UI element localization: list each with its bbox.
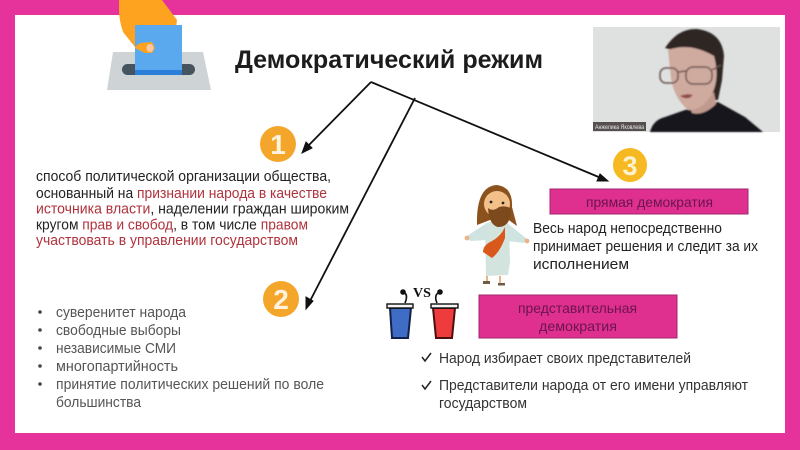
checklist: Представители народа от его имени управляют — [439, 378, 748, 394]
definition paragraph — [36, 169, 349, 249]
icon: ballot box with hand — [107, 0, 211, 90]
definition paragraph: кругом прав и свобод, в том числе правом — [36, 218, 308, 234]
definition paragraph: источника власти, наделении граждан широким — [36, 202, 349, 218]
icon: debate podiums versus: VS — [413, 286, 431, 301]
bullet list: независимые СМИ — [56, 341, 176, 357]
checklist: Народ избирает своих представителей — [439, 351, 691, 367]
bullet list: суверенитет народа — [56, 305, 187, 321]
bullet list: многопартийность — [56, 359, 178, 375]
title: Демократический режим — [235, 46, 543, 74]
webcam photo of presenter: Анжелика Яковлева — [595, 124, 644, 131]
arrow to point 3 — [371, 82, 608, 181]
arrow to point 2 — [306, 98, 415, 309]
number badge 2: 2 — [273, 284, 289, 315]
direct democracy description: Весь народ непосредственно — [533, 221, 722, 237]
label: representative democracy — [479, 295, 677, 338]
direct democracy description: принимает решения и следит за их — [533, 239, 759, 255]
bullet list — [38, 305, 324, 411]
bullet list: свободные выборы — [56, 323, 181, 339]
number badge 1: 1 — [270, 129, 286, 160]
bullet list: принятие политических решений по воле — [56, 377, 324, 393]
label: representative democracy: представительная — [518, 300, 637, 316]
checklist: государством — [439, 396, 527, 412]
number badge 2 — [263, 281, 299, 317]
illustration: bearded figure — [465, 185, 529, 286]
direct democracy description — [533, 221, 759, 273]
direct democracy description: исполнением — [533, 257, 629, 273]
number badge 1 — [260, 126, 296, 162]
bullet list: большинства — [56, 395, 142, 411]
label: direct democracy — [550, 189, 748, 214]
definition paragraph: основанный на признании народа в качестве — [36, 186, 327, 202]
label: direct democracy: прямая демократия — [586, 194, 713, 210]
number badge 3: 3 — [622, 151, 638, 181]
number badge 3 — [613, 148, 647, 182]
webcam photo of presenter — [593, 27, 780, 132]
label: representative democracy: демократия — [539, 318, 617, 334]
definition paragraph: способ политической организации общества, — [36, 169, 331, 185]
icon: debate podiums versus — [387, 286, 458, 338]
checklist — [422, 351, 748, 412]
definition paragraph: участвовать в управлении государством — [36, 233, 298, 249]
arrow to point 1 — [302, 82, 371, 153]
